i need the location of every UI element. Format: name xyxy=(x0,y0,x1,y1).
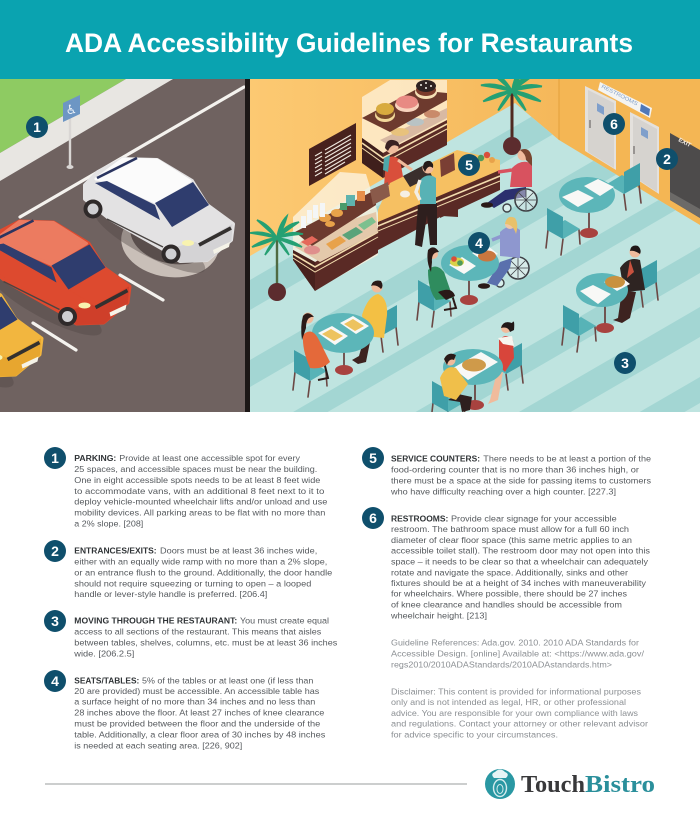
left potted plant xyxy=(250,216,303,301)
moving text xyxy=(73,616,337,658)
parking text: deploy vehicle-mounted wheelchair lifts and/or unload and use xyxy=(74,496,328,506)
moving text: access to all sections of the restaurant. This means that aisles xyxy=(74,627,321,637)
seats text: is needed at each seating area. [226, 902] xyxy=(74,740,242,750)
moving text: between tables, shelves, columns, etc. must be at least 36 inches xyxy=(74,638,337,648)
exit door: EXIT xyxy=(677,137,692,149)
restroom doors xyxy=(585,86,659,194)
guideline references xyxy=(391,638,645,669)
table: bottom with pizza xyxy=(431,322,524,412)
icon: chef hat seal xyxy=(485,769,515,799)
guideline 2: entrances and exits xyxy=(44,540,333,599)
disclaimer: advice. You are responsible for your own compliance with laws xyxy=(391,708,638,718)
table: accessible seating with wheelchair user xyxy=(417,217,529,327)
restrooms text: Provide clear signage for your accessible xyxy=(451,513,617,523)
floor with stripes xyxy=(250,103,700,412)
restrooms text xyxy=(390,513,650,620)
entrances text: ENTRANCES/EXITS: xyxy=(74,546,157,556)
service counters text: food-ordering counter that is no more than 36 inches high, or xyxy=(391,464,639,474)
cakes xyxy=(375,80,437,122)
entrances text xyxy=(74,546,333,599)
badge 5: 5 xyxy=(465,157,473,173)
entrances text: Doors must be at least 36 inches wide, xyxy=(160,546,317,556)
seats text: 28 inches above the floor. At least 27 inches of knee clearance xyxy=(74,708,325,718)
parking text: 25 spaces, and accessible spaces must be near the building. xyxy=(74,464,317,474)
staff member behind counter xyxy=(383,140,412,186)
entrances text: or an entrance flush to the ground. Additionally, the door handle xyxy=(74,568,333,578)
parking text: mobility devices. All parking areas to be flat with no more than xyxy=(74,508,326,518)
guideline references: Guideline References: Ada.gov. 2010. 2010 ADA Standards for xyxy=(391,638,639,648)
number marker 1 xyxy=(44,447,66,469)
TouchBistro logo xyxy=(485,769,655,799)
wall xyxy=(250,79,700,256)
restrooms sign xyxy=(598,82,652,118)
back plant xyxy=(480,79,542,155)
exit door xyxy=(670,133,700,218)
wordmark: Touch xyxy=(521,772,585,798)
menu board xyxy=(309,123,356,186)
moving text: You must create equal xyxy=(240,616,329,626)
entrances text: either with an equally wide ramp with no more than a 2% slope, xyxy=(74,557,327,567)
title banner xyxy=(0,0,700,79)
table: top right with papers xyxy=(546,163,641,255)
badge 3: 3 xyxy=(621,355,629,371)
guideline 5: service counters xyxy=(362,447,651,496)
number marker 5: 5 xyxy=(369,450,377,466)
guideline 4: seats and tables xyxy=(44,670,325,750)
title: ADA Accessibility Guidelines for Restaurants xyxy=(65,28,633,58)
guideline 6: restrooms xyxy=(362,507,650,620)
badge 4: 4 xyxy=(475,235,483,251)
number marker 2 xyxy=(44,540,66,562)
restrooms text: RESTROOMS: xyxy=(391,513,448,523)
guideline references: Accessible Design. [online] Available at: <https://www.ada.gov/ xyxy=(391,649,645,659)
parking text: to accommodate vans, with an additional 8 feet next to it to xyxy=(74,486,325,496)
badge 2 xyxy=(656,148,678,170)
parking text: PARKING: xyxy=(74,453,116,463)
customer in wheelchair at counter xyxy=(481,149,537,212)
parking lines xyxy=(20,87,244,350)
number marker 3: 3 xyxy=(51,613,59,629)
service counters text xyxy=(390,453,651,496)
grass xyxy=(0,79,126,153)
restrooms text: restroom. The bathroom space must allow for a full 60 inch xyxy=(391,524,629,534)
parking text: One in eight accessible spots needs to be at least 8 feet wide xyxy=(74,475,321,485)
parking text: Provide at least one accessible spot for every xyxy=(119,453,301,463)
badge 1: 1 xyxy=(33,119,41,135)
disclaimer xyxy=(391,686,648,740)
badge 5 xyxy=(458,154,480,176)
badge 6: 6 xyxy=(610,116,618,132)
lower food display case xyxy=(293,172,378,291)
TouchBistro logo: Bistro xyxy=(585,772,655,798)
number marker 4: 4 xyxy=(51,673,59,689)
icon: accessible parking sign xyxy=(63,95,80,169)
curb xyxy=(0,79,173,181)
entrances text: should not require squeezing or turning to open – a looped xyxy=(74,578,312,588)
restrooms text: fixtures should be at a height of 34 inches with maneuverability xyxy=(391,578,647,588)
number marker 4 xyxy=(44,670,66,692)
number marker 5 xyxy=(362,447,384,469)
number marker 2: 2 xyxy=(51,543,59,559)
white car xyxy=(84,158,233,283)
disclaimer: for advice specific to your circumstances. xyxy=(391,730,558,740)
parking text xyxy=(74,453,328,528)
seats text: table. Additionally, a clear floor area of 30 inches by 48 inches xyxy=(74,729,325,739)
divider between scenes xyxy=(245,79,250,412)
restrooms text: wheelchair height. [213] xyxy=(390,610,487,620)
table: right side with man xyxy=(562,246,658,352)
badge 3 xyxy=(614,352,636,374)
icon: accessible parking sign: ♿ xyxy=(66,103,77,118)
seats text: 20 are provided) must be accessible. An accessible table has xyxy=(74,686,319,696)
number marker 1: 1 xyxy=(51,450,59,466)
table: lower left with two guests xyxy=(293,281,398,397)
restrooms text: accessible toilet stall). The restroom door may not open into this xyxy=(391,546,650,556)
restrooms text: rotate and navigate the space. Additionally, sinks and other xyxy=(391,567,628,577)
counter items xyxy=(370,152,495,205)
seats text: SEATS/TABLES: xyxy=(74,675,139,685)
seats text: must be provided between the floor and the underside of the xyxy=(74,718,321,728)
turning circle xyxy=(121,229,218,278)
service counters text: SERVICE COUNTERS: xyxy=(391,453,480,463)
server standing at counter xyxy=(415,161,437,247)
restrooms text: for wheelchairs. Where possible, there should be 27 inches xyxy=(391,589,627,599)
guideline 3: moving through the restaurant xyxy=(44,610,337,658)
upper pastry display case xyxy=(362,80,447,178)
moving text: MOVING THROUGH THE RESTAURANT: xyxy=(74,616,237,626)
number marker 6: 6 xyxy=(369,510,377,526)
disclaimer: Disclaimer: This content is provided for informational purposes xyxy=(391,686,641,696)
main service counter xyxy=(378,150,500,250)
panel: restaurant illustration xyxy=(250,79,700,412)
guideline references: regs2010/2010ADAStandards/2010ADAstandards.htm> xyxy=(391,659,612,669)
service counters text: There needs to be at least a portion of the xyxy=(483,453,651,463)
badge 6 xyxy=(603,113,625,135)
service counters text: who have difficulty reaching over a high counter. [227.3] xyxy=(390,486,616,496)
disclaimer: only and is not intended as legal, HR, or other professional xyxy=(391,697,626,707)
guideline 1: parking xyxy=(44,447,328,528)
entrances text: handle or lever-style handle is preferred. [206.4] xyxy=(74,589,267,599)
restrooms sign: RESTROOMS xyxy=(600,84,639,108)
badge 1 xyxy=(26,116,48,138)
seats text: 5% of the tables or at least one (if less than xyxy=(142,675,314,685)
footer rule xyxy=(45,783,467,785)
moving text: wide. [206.2.5] xyxy=(73,648,134,658)
number marker 6 xyxy=(362,507,384,529)
number marker 3 xyxy=(44,610,66,632)
service counters text: there must be a space at the side for passing items to customers xyxy=(391,475,651,485)
yellow car xyxy=(0,293,44,388)
panel: parking lot illustration xyxy=(0,79,245,412)
seats text xyxy=(74,675,325,750)
seats text: a surface height of no more than 34 inches and no less than xyxy=(74,697,316,707)
badge 2: 2 xyxy=(663,151,671,167)
parking text: a 2% slope. [208] xyxy=(74,518,143,528)
restrooms text: of knee clearance and handles should be accessible from xyxy=(391,600,622,610)
disclaimer: and regulations. Contact your attorney or other relevant advisor xyxy=(391,719,648,729)
restrooms text: diameter of clear floor space (this same metric applies to an xyxy=(391,535,632,545)
red car xyxy=(0,220,130,346)
restrooms text: space – it needs to be clear so that a wheelchair can adequately xyxy=(391,556,649,566)
